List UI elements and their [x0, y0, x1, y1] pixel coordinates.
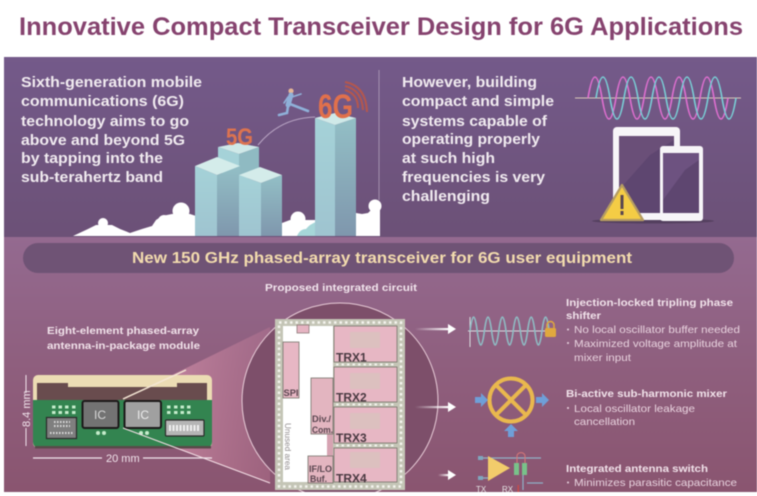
illustration: 6G building: [315, 113, 356, 236]
text block: 6G introduction: communications (6G): [21, 94, 184, 110]
text block: challenge: However, building: [402, 75, 537, 91]
icon: antenna switch: TX: [476, 485, 487, 494]
text block: antenna switch: [566, 463, 737, 489]
block: divider and combiner: Div./: [312, 414, 331, 425]
block: divider and combiner: Com.: [312, 425, 333, 436]
text block: phase shifter: No local oscillator buffer needed: [574, 324, 740, 336]
mixer output arrow: [536, 393, 549, 407]
block: TRX4: TRX4: [336, 472, 367, 486]
heading: antenna module: antenna-in-package module: [47, 340, 200, 352]
icon: antenna switch: RX: [502, 485, 514, 494]
block: divider and combiner: [311, 378, 333, 436]
block: SPI: [283, 342, 299, 399]
illustration: 5G buildings: [195, 143, 282, 236]
solder dots: [52, 406, 190, 435]
text block: challenge: at such high: [402, 151, 495, 167]
text block: mixer: [566, 388, 727, 428]
text block: 6G introduction: technology aims to go: [21, 114, 189, 130]
text block: phase shifter: Maximized voltage amplitude at: [574, 338, 737, 350]
text block: 6G introduction: [21, 75, 202, 186]
block: IF and LO buffer: [308, 456, 333, 485]
text block: phase shifter: [566, 297, 740, 364]
bottom margin: [0, 492, 757, 496]
dimension: width 20 mm: 20 mm: [106, 453, 140, 465]
illustration: light divider: [378, 70, 380, 200]
block: TRX3: TRX3: [336, 431, 367, 445]
text block: 6G introduction: sub-terahertz band: [21, 170, 163, 186]
panel: 6G challenge background: [4, 57, 757, 237]
title: Innovative Compact Transceiver Design for 6G Applications: [19, 13, 743, 41]
icon: shadow under devices: [592, 218, 714, 224]
block: TRX3: [334, 407, 397, 445]
zoom cone: [123, 327, 270, 483]
chip IC 1: IC: [94, 408, 106, 422]
chip IC 2: [124, 401, 161, 428]
text block: challenge: challenging: [402, 189, 490, 205]
icon: mixer: [475, 378, 549, 437]
dimension: height 8.4 mm: [21, 375, 33, 446]
heading: antenna module: Eight-element phased-array: [47, 325, 199, 337]
text block: challenge: compact and simple: [402, 94, 554, 110]
text block: challenge: frequencies is very: [402, 170, 545, 186]
icon: jumping runner: [279, 88, 308, 115]
icon: 5G label: 5G: [226, 124, 253, 151]
icon: tablet: [613, 127, 680, 220]
text block: phase shifter: Injection-locked tripling phase: [566, 297, 733, 309]
heading: proposed integrated circuit: Proposed integrated circuit: [265, 282, 418, 294]
arrow: to mixer: [415, 402, 456, 412]
icon: lock: [545, 322, 556, 337]
arrow: to phase shifter: [415, 324, 456, 334]
text block: 6G introduction: above and beyond 5G: [21, 133, 185, 149]
text block: phase shifter: mixer input: [574, 352, 631, 364]
panel: transceiver background: [4, 237, 757, 492]
block: small pad: [297, 325, 309, 333]
dimension: height 8.4 mm: 8.4 mm: [21, 390, 33, 427]
module: antenna-in-package: [33, 375, 212, 448]
icon: high-frequency waves: [575, 77, 741, 119]
block: IF and LO buffer: Buf.: [310, 474, 327, 485]
left connector: [46, 418, 76, 438]
text block: mixer: cancellation: [574, 416, 635, 428]
block: TRX1: [334, 326, 397, 364]
block: TRX1: TRX1: [336, 350, 367, 364]
zoom circle: [242, 303, 438, 496]
right connector: [166, 420, 204, 436]
block: TRX4: [334, 448, 397, 486]
mixer input arrow: [475, 393, 488, 407]
arrow: to antenna switch: [438, 470, 456, 480]
illustration: clouds: [73, 200, 382, 236]
zoom cone lower edge highlight: [123, 428, 270, 483]
banner text: New 150 GHz phased-array transceiver for 6G user equipment: [132, 250, 632, 267]
block: IF and LO buffer: IF/LO: [309, 464, 332, 475]
icon: jump arc: [258, 117, 315, 145]
text block: challenge: [402, 75, 554, 205]
icon: warning triangle: [601, 185, 643, 220]
chip IC 1: [82, 401, 118, 428]
chip IC 2: IC: [137, 408, 149, 422]
mixer LO arrow: [504, 424, 518, 437]
text block: phase shifter: shifter: [566, 310, 601, 322]
block: TRX2: [334, 367, 397, 404]
icon: phone: [660, 146, 703, 221]
icon: 6G label: 6G: [318, 88, 353, 126]
text block: antenna switch: Minimizes parasitic capacitance: [574, 477, 737, 489]
block: SPI: SPI: [284, 388, 298, 399]
text block: challenge: systems capable of: [402, 114, 547, 130]
text block: challenge: operating properly: [402, 132, 540, 148]
zoom cone upper edge highlight: [123, 370, 186, 399]
block: TRX2: TRX2: [336, 390, 367, 404]
text block: 6G introduction: by tapping into the: [21, 151, 163, 167]
icon: antenna switch: [476, 453, 543, 494]
text block: antenna switch: Integrated antenna switch: [566, 463, 708, 475]
banner: [23, 243, 734, 273]
label: unused area: Unused area: [283, 423, 293, 470]
icon: phase shifter waveform: [468, 317, 556, 347]
icon: 6G signal waves: [345, 82, 367, 112]
heading: antenna module: [47, 325, 200, 352]
text block: mixer: Local oscillator leakage: [574, 403, 695, 415]
text block: mixer: Bi-active sub-harmonic mixer: [566, 388, 727, 400]
text block: 6G introduction: Sixth-generation mobile: [21, 75, 202, 91]
integrated circuit die: [275, 319, 405, 490]
